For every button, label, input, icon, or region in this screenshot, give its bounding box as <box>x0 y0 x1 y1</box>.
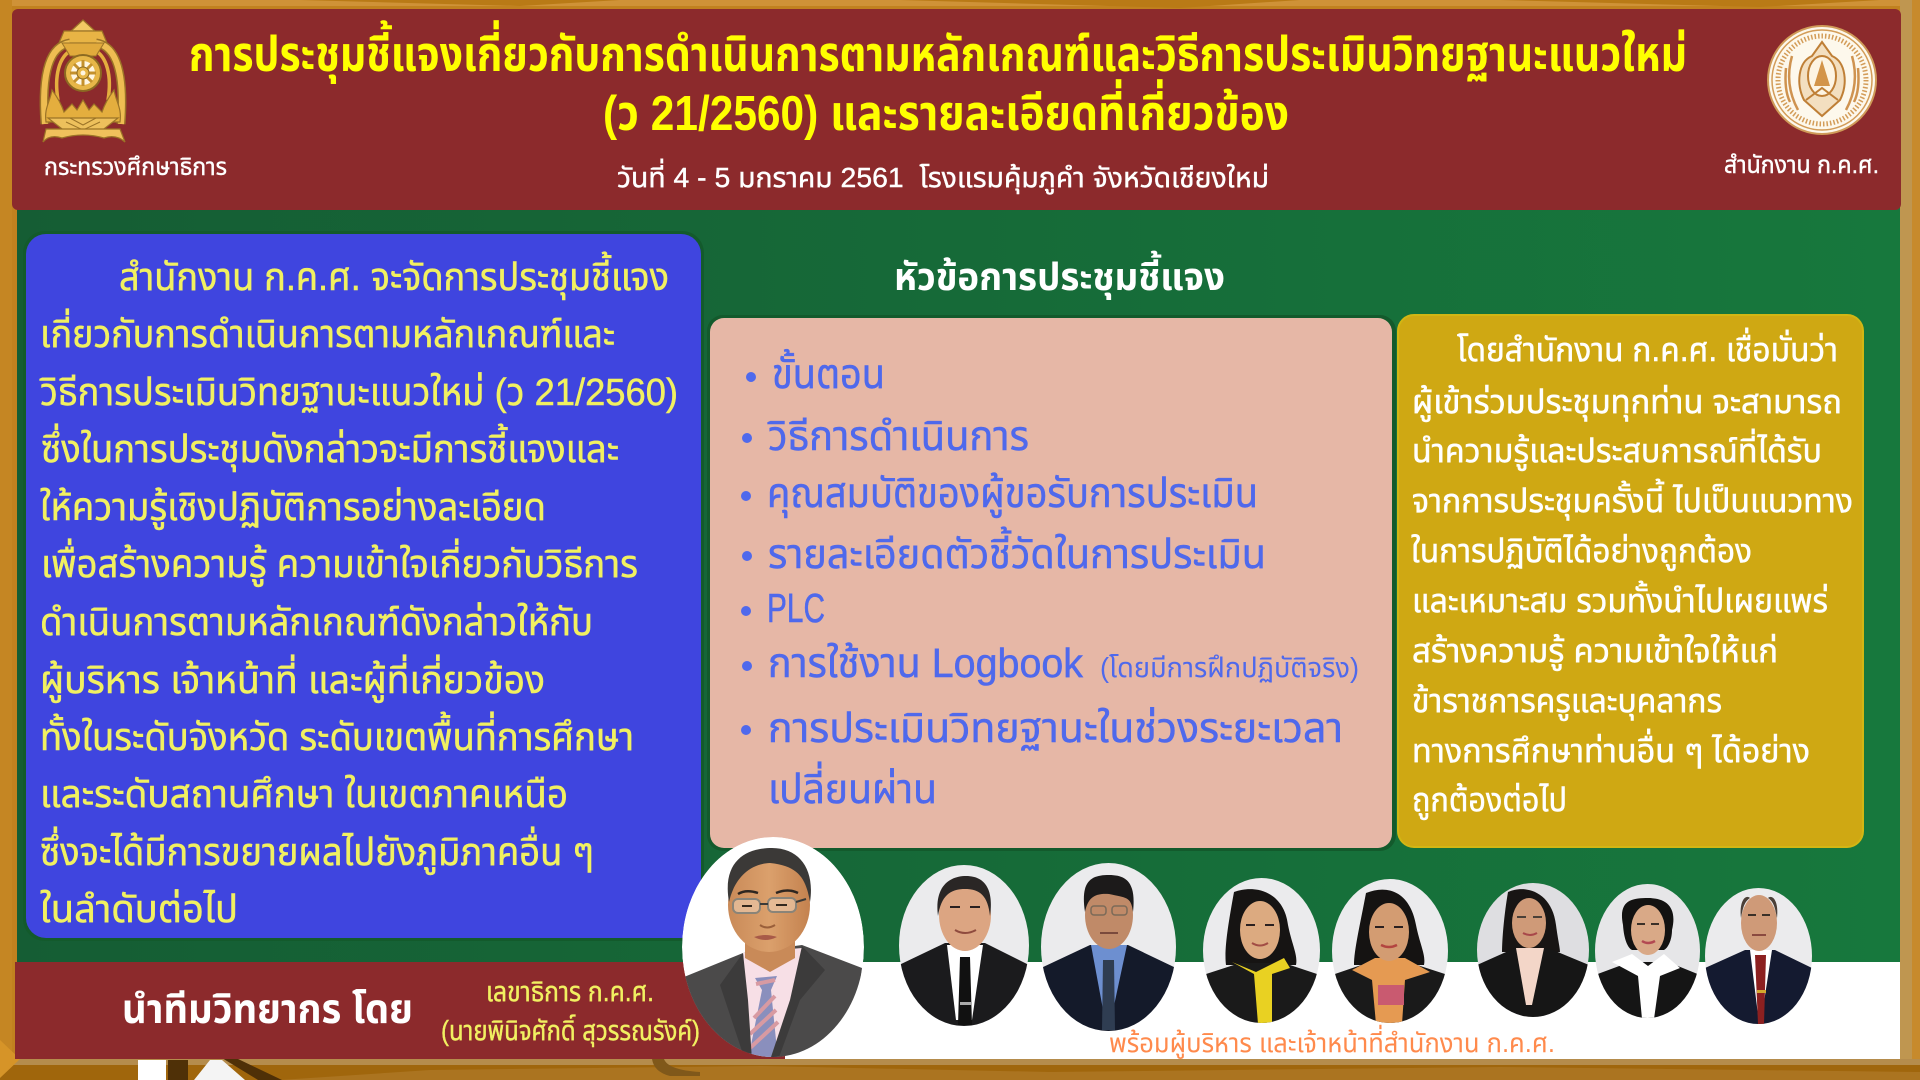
panel: introduction (blue): ในลำดับต่อไป <box>40 889 238 931</box>
easel legs at bottom <box>138 1058 700 1080</box>
panel: introduction (blue): และระดับสถานศึกษา ในเขตภาคเหนือ <box>40 774 568 816</box>
panel: confidence statement (gold): โดยสำนักงาน ก.ค.ศ. เชื่อมั่นว่า <box>1457 327 1838 368</box>
label: ministry name: กระทรวงศึกษาธิการ <box>44 154 227 181</box>
portrait: secretary general <box>682 837 864 1060</box>
icon: Ministry of Education emblem <box>43 20 125 142</box>
panel: topics list (peach): รายละเอียดตัวชี้วัดในการประเมิน <box>768 526 1266 577</box>
panel: introduction (blue): ดำเนินการตามหลักเกณฑ์ดังกล่าวให้กับ <box>40 602 593 644</box>
label: OTEPC: สำนักงาน ก.ค.ศ. <box>1724 152 1879 179</box>
label: secretary general: เลขาธิการ ก.ค.ศ. <box>486 976 654 1007</box>
panel: topics list (peach): การใช้งาน Logbook <box>768 640 1083 686</box>
panel: introduction (blue): เกี่ยวกับการดำเนินการตามหลักเกณฑ์และ <box>40 308 615 356</box>
panel: topics list (peach): PLC <box>767 585 825 631</box>
portrait: executive 5 <box>1477 883 1589 1018</box>
panel: topics list (peach): คุณสมบัติของผู้ขอรับการประเมิน <box>767 470 1258 518</box>
panel: introduction (blue): ให้ความรู้เชิงปฏิบัติการอย่างละเอียด <box>40 487 546 530</box>
green chalkboard background <box>17 205 1900 965</box>
panel: introduction (blue): วิธีการประเมินวิทยฐานะแนวใหม่ (ว 21/2560) <box>39 372 678 414</box>
panel: introduction (blue) <box>23 231 704 941</box>
portrait: executive 7 <box>1705 888 1812 1024</box>
panel: topics list (peach): การประเมินวิทยฐานะในช่วงระยะเวลา <box>768 705 1343 751</box>
panel: introduction (blue): ผู้บริหาร เจ้าหน้าที่ และผู้ที่เกี่ยวข้อง <box>40 654 545 703</box>
portrait: executive 6 <box>1595 884 1700 1019</box>
panel: topics list (peach): ขั้นตอน <box>772 348 885 397</box>
label: speakers led by: นำทีมวิทยากร โดย <box>122 986 413 1032</box>
topic bullets <box>741 372 756 735</box>
panel: confidence statement (gold): ถูกต้องต่อไป <box>1412 781 1567 820</box>
panel: introduction (blue): ทั้งในระดับจังหวัด ระดับเขตพื้นที่การศึกษา <box>40 711 634 759</box>
title line 2: (ว 21/2560) และรายละเอียดที่เกี่ยวข้อง <box>603 79 1289 141</box>
caption: with executives and staff: พร้อมผู้บริหาร และเจ้าหน้าที่สำนักงาน ก.ค.ศ. <box>1109 1024 1555 1059</box>
panel: introduction (blue): สำนักงาน ก.ค.ศ. จะจัดการประชุมชี้แจง <box>119 251 669 300</box>
panel: confidence statement (gold): ทางการศึกษาท่านอื่น ๆ ได้อย่าง <box>1412 728 1810 769</box>
portrait: executive 1 <box>899 865 1029 1027</box>
date and venue: วันที่ 4 - 5 มกราคม 2561 โรงแรมคุ้มภูคำ จังหวัดเชียงใหม่ <box>617 158 1269 195</box>
panel: confidence statement (gold): ผู้เข้าร่วมประชุมทุกท่าน จะสามารถ <box>1412 383 1842 422</box>
panel: introduction (blue): ซึ่งจะได้มีการขยายผลไปยังภูมิภาคอื่น ๆ <box>40 826 594 875</box>
panel: confidence statement (gold): และเหมาะสม รวมทั้งนำไปเผยแพร่ <box>1412 580 1828 619</box>
panel: topics list (peach): วิธีการดำเนินการ <box>767 413 1029 459</box>
portrait: executive 3 <box>1203 878 1320 1024</box>
panel: confidence statement (gold): นำความรู้และประสบการณ์ที่ได้รับ <box>1412 428 1822 471</box>
panel: topics list (peach): เปลี่ยนผ่าน <box>768 761 937 812</box>
panel: topics list (peach): (โดยมีการฝึกปฏิบัติจริง) <box>1100 652 1359 683</box>
panel: confidence statement (gold): ข้าราชการครูและบุคลากร <box>1412 682 1722 721</box>
panel: confidence statement (gold): ในการปฏิบัติได้อย่างถูกต้อง <box>1411 532 1752 571</box>
heading: meeting topics: หัวข้อการประชุมชี้แจง <box>894 250 1225 300</box>
panel: confidence statement (gold) <box>1398 315 1863 847</box>
label: name: (นายพินิจศักดิ์ สุวรรณรังค์) <box>441 1015 700 1047</box>
panel: introduction (blue): เพื่อสร้างความรู้ ความเข้าใจเกี่ยวกับวิธีการ <box>41 538 638 587</box>
portrait: executive 2 <box>1041 863 1176 1031</box>
panel: topics list (peach) <box>707 315 1396 851</box>
icon: OTEPC seal <box>1768 26 1876 134</box>
bottom strip: team <box>15 962 1900 1059</box>
header banner <box>12 9 1901 210</box>
panel: confidence statement (gold): สร้างความรู้ ความเข้าใจให้แก่ <box>1412 632 1778 671</box>
panel: introduction (blue): ซึ่งในการประชุมดังกล่าวจะมีการชี้แจงและ <box>41 423 619 472</box>
portrait: executive 4 <box>1332 879 1448 1024</box>
panel: confidence statement (gold): จากการประชุมครั้งนี้ ไปเป็นแนวทาง <box>1412 478 1853 521</box>
